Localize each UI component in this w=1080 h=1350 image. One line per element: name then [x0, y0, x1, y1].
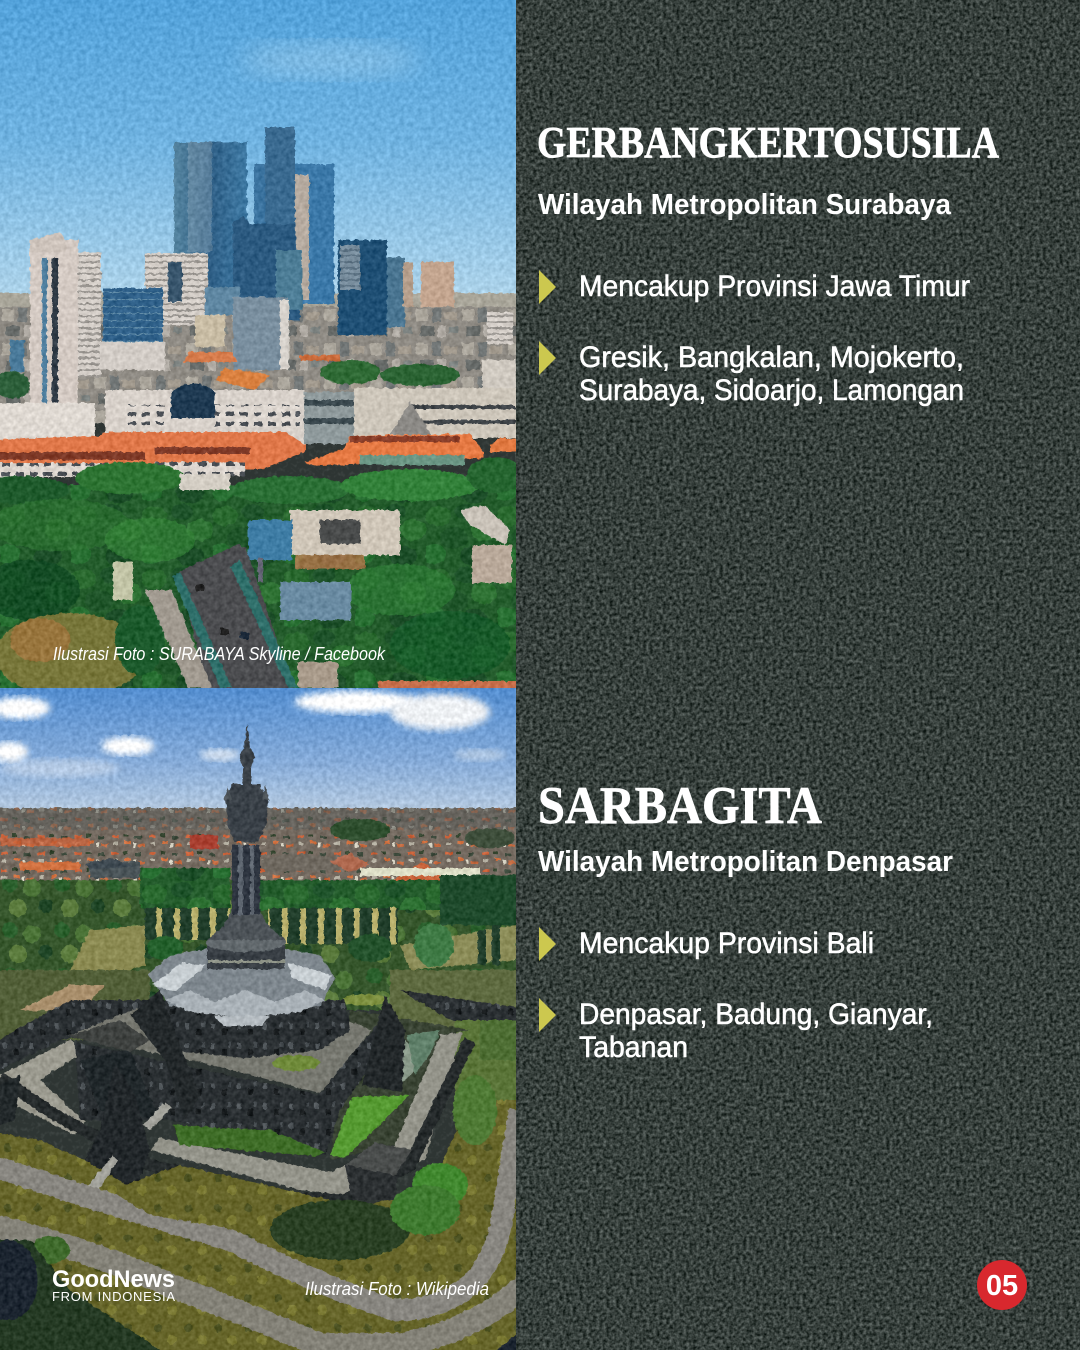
photo: Surabaya skyline	[0, 0, 536, 708]
caption: Denpasar photo credit: Ilustrasi Foto : Wikipedia	[305, 1279, 489, 1299]
bullet text: province: Mencakup Provinsi Bali	[579, 927, 874, 960]
section: Gerbangkertosusila	[537, 117, 999, 407]
heading: SARBAGITA	[538, 777, 822, 835]
bullet text: regencies	[579, 341, 964, 407]
photo: Bajra Sandhi monument, Denpasar	[0, 668, 536, 1350]
logo: GoodNews from Indonesia: FROM INDONESIA	[52, 1289, 175, 1304]
subheading: Wilayah Metropolitan Denpasar	[538, 846, 953, 878]
icon: bullet arrow	[539, 998, 556, 1032]
page number badge	[977, 1260, 1027, 1310]
bullet text: regencies: Denpasar, Badung, Gianyar,	[579, 998, 933, 1031]
icon: bullet arrow	[539, 270, 556, 304]
bullet text: regencies: Surabaya, Sidoarjo, Lamongan	[579, 374, 964, 407]
bullet text: province: Mencakup Provinsi Jawa Timur	[579, 270, 970, 303]
icon: bullet arrow	[539, 341, 556, 375]
subheading: Wilayah Metropolitan Surabaya	[538, 189, 952, 221]
heading: GERBANGKERTOSUSILA	[537, 117, 999, 167]
panel: dark textured background	[515, 0, 1080, 1350]
icon: bullet arrow	[539, 927, 556, 961]
section: Sarbagita	[538, 777, 953, 1064]
caption: Surabaya photo credit: Ilustrasi Foto : SURABAYA Skyline / Facebook	[53, 644, 386, 664]
bullet text: regencies: Gresik, Bangkalan, Mojokerto,	[579, 341, 964, 374]
logo: GoodNews from Indonesia	[52, 1266, 175, 1304]
logo: GoodNews from Indonesia: GoodNews	[52, 1266, 175, 1293]
bullet text: regencies	[579, 998, 933, 1064]
page number badge: 05	[986, 1270, 1018, 1302]
bullet text: regencies: Tabanan	[579, 1031, 688, 1064]
